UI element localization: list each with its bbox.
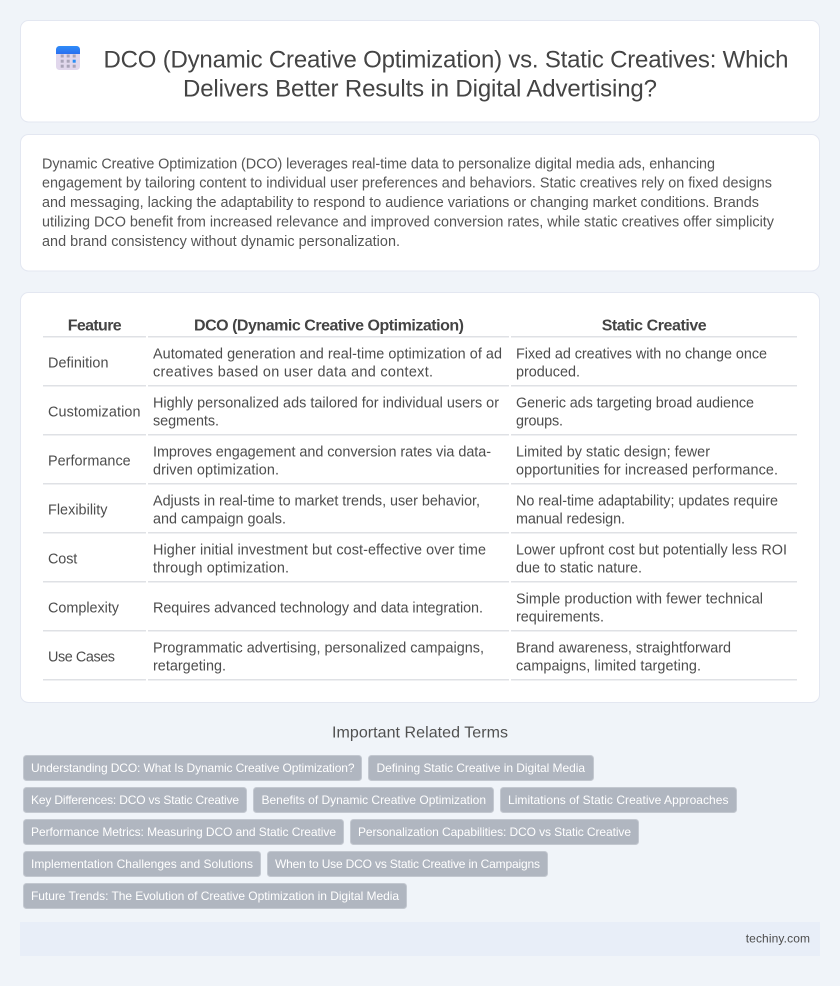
row: Definition: Automated generation and real-time optimization of ad <box>153 346 502 362</box>
row: Definition: Fixed ad creatives with no change once <box>516 346 767 362</box>
row: Customization: Generic ads targeting broad audience <box>516 395 754 411</box>
row: Flexibility: Adjusts in real-time to market trends, user behavior, <box>153 493 480 509</box>
chip: When to Use DCO vs Static Creative in Campaigns <box>275 857 540 871</box>
panel: header <box>20 20 820 122</box>
row: Customization: segments. <box>153 413 219 429</box>
title: DCO (Dynamic Creative Optimization) vs. Static Creatives: Which <box>104 46 788 74</box>
row: Cost: due to static nature. <box>516 560 642 576</box>
row: Flexibility <box>43 493 797 534</box>
text block: description: and brand consistency without dynamic personalization. <box>42 234 400 250</box>
chip: Benefits of Dynamic Creative Optimization <box>262 793 486 807</box>
chip: Future Trends: The Evolution of Creative Optimization in Digital Media <box>31 889 399 903</box>
row: Performance: Improves engagement and conversion rates via data- <box>153 444 491 460</box>
panel: related terms chips <box>24 756 736 908</box>
table header row: Feature <box>68 318 122 335</box>
footer: techiny.com <box>746 931 810 945</box>
row: Performance: opportunities for increased performance. <box>516 462 778 478</box>
row: Performance: driven optimization. <box>153 462 279 478</box>
text block: description: engagement by tailoring content to individual user preferences and behaviors. Static creatives rely on fixed designs <box>42 176 772 192</box>
row: Cost <box>43 542 797 582</box>
panel: description <box>20 134 820 271</box>
row: Cost: Cost <box>48 551 77 567</box>
chip: Performance Metrics: Measuring DCO and Static Creative <box>31 825 336 839</box>
chip <box>500 788 736 812</box>
row: Customization: groups. <box>516 413 563 429</box>
row: Complexity: requirements. <box>516 609 604 625</box>
title: Delivers Better Results in Digital Advertising? <box>183 76 657 102</box>
row: Use Cases: Programmatic advertising, personalized campaigns, <box>153 640 484 656</box>
row: Use Cases: Brand awareness, straightforward <box>516 640 731 656</box>
chip <box>254 788 494 812</box>
row: Cost: through optimization. <box>153 560 289 576</box>
chip: Key Differences: DCO vs Static Creative <box>31 793 239 807</box>
row: Complexity: Requires advanced technology and data integration. <box>153 600 483 616</box>
row: Flexibility: and campaign goals. <box>153 511 286 527</box>
row: Customization: Customization <box>48 404 140 420</box>
text block: description: Dynamic Creative Optimization (DCO) leverages real-time data to personalize digital media ads, enhancing <box>42 156 715 172</box>
row: Flexibility: manual redesign. <box>516 511 625 527</box>
chip <box>24 820 344 844</box>
text block: description: and messaging, lacking the adaptability to respond to audience variations or changing market conditions. Brands <box>42 195 759 211</box>
row: Definition: produced. <box>516 364 580 380</box>
chip <box>24 788 246 812</box>
row: Complexity: Simple production with fewer technical <box>516 591 763 607</box>
row: Use Cases: retargeting. <box>153 658 226 674</box>
chip: Limitations of Static Creative Approaches <box>508 793 728 807</box>
text block: description <box>42 156 775 250</box>
chip <box>24 852 260 876</box>
row: Use Cases: campaigns, limited targeting. <box>516 658 701 674</box>
row: Performance: Performance <box>48 453 131 469</box>
text block: description: utilizing DCO benefit from increased relevance and improved conversion rates, while static creatives offer simplicity <box>42 215 775 231</box>
row: Definition: creatives based on user data and context. <box>153 364 433 380</box>
chip <box>24 756 362 780</box>
chip: Implementation Challenges and Solutions <box>31 857 253 871</box>
panel: comparison table <box>20 292 820 702</box>
title <box>104 46 788 102</box>
table header row <box>43 318 797 338</box>
footer <box>20 922 820 956</box>
heading: Important Related Terms: Important Related Terms <box>332 725 508 742</box>
row: Flexibility: No real-time adaptability; updates require <box>516 493 778 509</box>
row: Cost: Higher initial investment but cost-effective over time <box>153 542 486 558</box>
row: Cost: Lower upfront cost but potentially less ROI <box>516 542 787 558</box>
row: Definition: Definition <box>48 355 108 371</box>
row: Use Cases <box>43 640 797 680</box>
icon: calendar <box>56 46 80 70</box>
row: Complexity: Complexity <box>48 600 120 616</box>
row: Flexibility: Flexibility <box>48 502 108 518</box>
table header row: Static Creative <box>602 318 707 335</box>
chip <box>368 756 594 780</box>
chip <box>268 852 548 876</box>
chip <box>24 884 406 908</box>
row: Complexity <box>43 591 797 632</box>
chip: Understanding DCO: What Is Dynamic Creative Optimization? <box>31 761 355 775</box>
chip: Personalization Capabilities: DCO vs Static Creative <box>358 825 631 839</box>
table header row: DCO (Dynamic Creative Optimization) <box>194 318 464 335</box>
row: Use Cases: Use Cases <box>48 649 115 665</box>
row: Performance <box>43 444 797 484</box>
row: Customization <box>43 395 797 436</box>
chip: Defining Static Creative in Digital Media <box>376 761 585 775</box>
chip <box>350 820 638 844</box>
row: Customization: Highly personalized ads tailored for individual users or <box>153 395 499 411</box>
row: Performance: Limited by static design; fewer <box>516 444 710 460</box>
row: Definition <box>43 346 797 386</box>
